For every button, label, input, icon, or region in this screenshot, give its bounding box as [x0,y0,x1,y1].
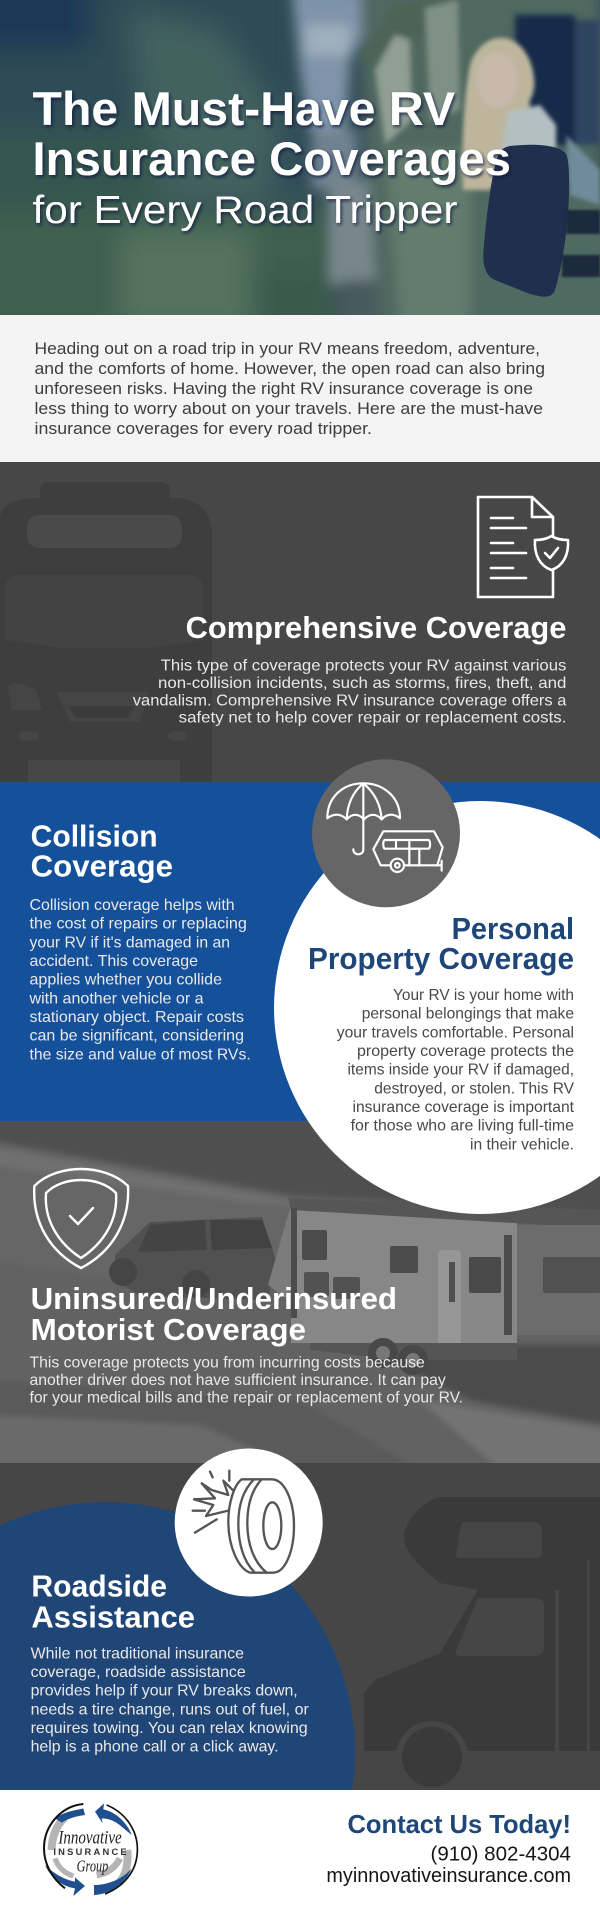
icon: umbrella and travel trailer in gray circle [312,759,460,907]
heading [31,819,173,884]
heading: Personal [452,911,574,946]
body text: your RV if it's damaged in an [30,934,230,951]
intro text: unforeseen risks. Having the right RV insurance coverage is one [34,380,533,398]
heading: Motorist Coverage [31,1312,306,1347]
body text: stationary object. Repair costs [30,1009,244,1026]
heading: Coverage [31,849,173,884]
body text: in their vehicle. [470,1136,574,1153]
background: RV side silhouette [364,1497,600,1793]
intro text: Heading out on a road trip in your RV means freedom, adventure, [34,340,540,358]
heading [31,1569,195,1635]
heading: Roadside [31,1569,167,1604]
panel: hero header [0,0,600,350]
icon: shield with check mark [34,1169,128,1268]
body text [28,897,251,1063]
intro text: and the comforts of home. However, the open road can also bring [34,360,545,378]
icon: policy document with shield [478,497,568,597]
body text [133,658,566,727]
heading: Assistance [31,1600,195,1635]
body text: accident. This coverage [30,953,198,970]
body text: Collision coverage helps with [30,897,235,914]
body text: needs a tire change, runs out of fuel, or [31,1701,309,1718]
heading: Uninsured/Underinsured [31,1281,397,1316]
heading: Property Coverage [308,941,574,976]
body text [337,987,575,1153]
body text: provides help if your RV breaks down, [31,1683,298,1700]
body text: property coverage protects the [357,1043,574,1060]
background: photo of truck towing trailer [0,1115,600,1470]
body text: with another vehicle or a [28,990,204,1007]
background: RV front silhouette [0,482,212,782]
body text: your travels comfortable. Personal [337,1024,574,1041]
title: The Must-Have RV [32,82,456,135]
logo: Innovative Insurance Group: Innovative [58,1827,122,1848]
body text: for your medical bills and the repair or replacement of your RV. [30,1389,463,1406]
body text: This type of coverage protects your RV against various [161,658,566,675]
blue circle background [0,1502,355,1790]
icon: burst tire in white circle [175,1448,323,1596]
intro text [34,340,545,438]
panel: comprehensive coverage [0,462,600,782]
body text [31,1645,309,1756]
heading: Collision [31,819,158,854]
body text: the cost of repairs or replacing [30,916,247,933]
body text: applies whether you collide [30,972,222,989]
body text: coverage, roadside assistance [31,1664,246,1681]
title: Insurance Coverages [32,132,511,185]
body text: can be significant, considering [30,1028,244,1045]
body text: items inside your RV if damaged, [348,1062,574,1079]
body text: non-collision incidents, such as storms, fires, theft, and [158,675,566,692]
panel: introduction [0,315,600,462]
panel: collision coverage [0,782,600,1121]
body text: destroyed, or stolen. This RV [374,1080,574,1097]
body text: While not traditional insurance [31,1645,244,1662]
panel: personal property coverage [274,759,600,1214]
body text: safety net to help cover repair or replacement costs. [179,710,566,727]
heading [31,1281,397,1347]
intro text: insurance coverages for every road tripper. [34,420,372,438]
intro text: less thing to worry about on your travels. Here are the must-have [34,400,543,418]
body text: for those who are living full-time [351,1118,574,1135]
logo: Innovative Insurance Group: INSURANCE [53,1847,127,1857]
title [32,82,511,232]
heading [308,911,574,976]
body text: vandalism. Comprehensive RV insurance coverage offers a [133,692,566,709]
panel: uninsured/underinsured motorist coverage [0,1115,600,1470]
body text: help is a phone call or a click away. [31,1739,279,1756]
logo: Innovative Insurance Group: Group [77,1857,108,1876]
contact heading: Contact Us Today! [348,1809,571,1839]
hero photo: forest, road, RV and woman [0,0,600,350]
body text: This coverage protects you from incurring costs because [30,1355,425,1372]
website: myinnovativeinsurance.com [326,1865,571,1887]
heading: Comprehensive Coverage [186,610,566,645]
logo: Innovative Insurance Group [44,1803,137,1896]
body text: the size and value of most RVs. [30,1046,251,1063]
panel: roadside assistance [0,1448,600,1790]
body text: insurance coverage is important [352,1099,575,1116]
title: for Every Road Tripper [32,189,458,232]
panel: footer [0,1790,600,1907]
body text: Your RV is your home with [393,987,574,1004]
body text [30,1355,463,1406]
body text: personal belongings that make [362,1006,574,1023]
phone number: (910) 802-4304 [430,1844,571,1866]
body text: requires towing. You can relax knowing [31,1720,308,1737]
body text: another driver does not have sufficient insurance. It can pay [30,1372,446,1389]
